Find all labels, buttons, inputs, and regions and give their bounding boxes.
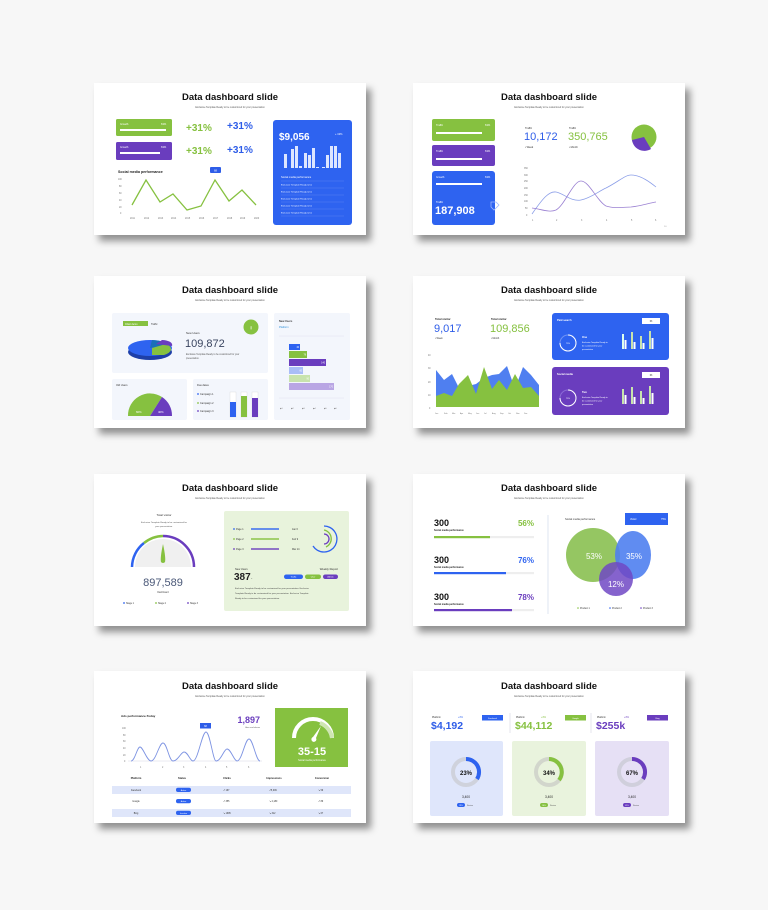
table: platforms: Facebook [131,790,142,792]
stats: total visitor: Total visitor [435,317,452,321]
panel: weekly report: User [311,576,316,579]
panel: weekly report: Page 1 [236,528,244,531]
card: donut blue 23%: Review [467,805,474,807]
wave chart: ads performance: 60 [123,741,126,743]
stats: platforms: Platform [516,716,525,719]
panel: weekly report: Mar 14 [292,548,300,551]
area chart: Jun [476,413,479,415]
panel: weekly report: Page 3 [236,548,244,551]
progress rows: 56% [518,519,534,528]
card: donut green 34%: Review [550,805,557,807]
panel: social media: Exclusive Template Ready to [582,396,609,399]
title [182,681,278,698]
area chart: Aug [492,412,496,415]
stats: platforms: Platform [597,716,606,719]
card: growth blue large: Traffic [436,200,444,204]
line chart: 5 [631,220,633,222]
panel: new users: 109,872 [185,338,225,350]
progress rows: 300 [434,518,449,528]
line chart: 150 [524,195,529,197]
progress rows: Social media performance [434,529,464,532]
card: donut purple 67%: 67% [625,805,629,807]
stats: traffic: • Week [525,145,534,149]
panel: new users platform bars: ◆1 [280,407,284,410]
panel: paid search: presentation [582,348,593,351]
line chart: 200 [524,188,529,190]
table: platforms: ↗5,009 [269,789,277,792]
panel: blue revenue: Exclusive Template Ready to be [281,190,313,194]
card: growth blue large: 187,908 [435,205,475,217]
table: platforms: Active [181,800,187,803]
panel: paid search: 75% [566,343,570,345]
panel: old users: 40% [158,410,164,414]
line chart: social media performance: 60 [119,193,122,195]
panel: new users platform bars: ◆3 [302,407,306,410]
panel: green gauge: 35-15 [298,746,326,758]
table: platforms: ↘ 67 [318,812,324,815]
wave chart: ads performance: 4 [205,767,207,769]
title: Data dashboard slide [182,92,278,103]
stats: total visitor: 109,856 [490,323,530,335]
panel: paid search [552,313,669,360]
card: traffic green: 63% [485,123,491,127]
line chart: social media performance: 2020 [254,218,260,220]
panel: new users [112,313,268,373]
gauge: total visitor: Dashboard [157,591,169,594]
line chart: social media performance: 68 [214,168,217,172]
title: Data dashboard slide [501,92,597,103]
panel: social media: Social media [557,372,573,376]
progress rows: 78% [518,593,534,602]
line chart: 3 [581,220,583,222]
venn diagram: Social media performance [565,517,596,521]
wave chart: ads performance [121,714,262,769]
line chart: social media performance: Social media performance [118,170,163,174]
line chart: 100 [524,201,529,203]
table: platforms: Platform [131,776,142,780]
area chart: Mar [452,413,456,415]
venn diagram: 53% [586,552,602,561]
panel: new users platform bars: ◆6 [334,407,338,410]
line chart: 6 [655,220,657,222]
line chart: 10 [664,226,667,228]
slide 7: ads performance and table [94,671,366,823]
wave chart: ads performance: 100 [122,728,127,730]
card: traffic green [432,119,495,141]
venn diagram: 35% [626,552,642,561]
panel: weekly report: Traffic [291,576,297,579]
panel: due dates: Campaign 1 [200,393,214,396]
card: donut green 34%: 3,400 [545,795,553,799]
card: donut purple 67%: 3,400 [628,795,636,799]
area chart: Oct [508,412,512,415]
area chart: Nov [516,413,520,415]
stats: platforms: Google [572,718,580,720]
wave chart: ads performance: 40 [123,748,126,750]
panel: new users platform bars [274,313,350,420]
panel: blue revenue: Exclusive Template Ready to be [281,184,313,186]
line chart: 300 [524,175,529,177]
area chart: 10 [428,395,431,397]
panel: new users platform bars: 40 [296,347,300,349]
panel: weekly report: Jan 6 [292,528,299,531]
panel: new users: presentation. [186,357,200,360]
panel: new users platform bars: ◆2 [291,407,295,410]
card: growth purple [116,142,172,160]
panel: social media: Two [582,390,587,394]
panel: paid search: Paid search [557,318,572,322]
panel: weekly report [224,511,349,611]
panel: blue revenue: Exclusive Template Ready to be [281,204,313,208]
card: growth purple: Growth [120,145,129,149]
title: Exclusive Template Ready to be customized for your presentation [514,497,584,500]
gauge: total visitor [123,513,199,605]
venn diagram: Visitor [630,518,637,521]
line chart: 1 [532,220,534,222]
line chart: 350 [524,168,529,170]
stats: platforms: +3% [458,716,464,719]
wave chart: ads performance: 2 [162,767,164,769]
panel: weekly report: Admin [327,576,334,579]
wave chart: ads performance: Likes and shares [245,727,260,729]
line chart: social media performance: 40 [119,200,122,202]
line chart [524,168,667,228]
line chart: social media performance: 20 [119,207,122,209]
title: Data dashboard slide [182,285,278,296]
panel: social media: presentation [582,403,593,406]
title: Exclusive Template Ready to be customized for your presentation [514,695,584,698]
line chart: social media performance: 2018 [227,218,233,220]
slide 5: gauge and weekly report [94,474,366,626]
line chart: 50 [525,208,528,210]
card: growth green [116,119,172,136]
progress rows: 300 [434,555,449,565]
venn diagram: 12% [608,580,624,589]
stats: traffic: Traffic [569,126,577,130]
card: donut green 34%: 34% [542,805,546,807]
panel: old users: 60% [136,410,142,414]
panel: paid search: One [582,335,588,339]
table: platforms: ↘ 312 [269,812,276,815]
card: donut purple 67%: 67% [626,771,639,777]
wave chart: ads performance: 1 [140,767,142,769]
title: Data dashboard slide [501,483,597,494]
title: Exclusive Template Ready to be customized for your presentation [195,497,265,500]
stats +31%: +31% [186,123,212,134]
line chart: social media performance [118,167,260,220]
title: Data dashboard slide [501,681,597,692]
slide 3: new users 3D pie and bars [94,276,366,428]
panel: blue revenue: Social media performance [281,175,312,179]
panel: new users: Exclusive Template Ready to be customized for your [186,353,240,356]
wave chart: ads performance: 3 [183,767,185,769]
panel: weekly report: Weekly Report [320,567,338,571]
card: growth blue large [432,171,499,225]
stats: total visitor: • Week [435,337,443,340]
gauge: total visitor: Stage 3 [190,602,199,605]
pie chart [632,124,656,151]
stats: platforms: +3% [541,716,547,719]
card: traffic green: Traffic [436,123,444,127]
panel: new users platform bars: Platform [279,325,289,329]
slide 1: growth and social media performance [94,83,366,235]
wave chart: ads performance: 6 [248,767,250,769]
progress rows [434,518,534,611]
card: donut blue 23% [430,741,503,816]
stats: total visitor: 9,017 [434,323,462,335]
panel: new users: Traffic [151,323,158,326]
title [501,681,597,698]
panel: weekly report: New Users [235,567,248,571]
card: traffic purple: 63% [485,149,491,153]
panel: paid search: be customized for your [582,344,603,348]
title: Exclusive Template Ready to be customized for your presentation [195,106,265,109]
progress rows: Social media performance [434,566,464,569]
panel: due dates: Campaign 3 [200,410,214,413]
gauge: total visitor: Stage 1 [126,602,135,605]
line chart: social media performance: 2015 [185,218,191,220]
stats: platforms: $255k [596,720,625,732]
table: platforms: ↘ 1695 [223,812,231,815]
line chart: social media performance: 2012 [144,218,150,220]
panel: blue revenue: Exclusive Template Ready to be [281,212,313,214]
table: platforms: Google [132,801,140,803]
panel: social media: 63 [650,375,653,377]
venn diagram: Product 2 [612,607,623,610]
area chart: 20 [428,382,431,384]
gauge: total visitor: 897,589 [143,577,183,589]
area chart: May [468,413,472,415]
wave chart: ads performance: Ads performance-Today [121,714,156,718]
title: Exclusive Template Ready to be customized for your presentation [195,695,265,698]
progress rows: 76% [518,556,534,565]
card: donut blue 23%: 23% [459,805,463,807]
panel: new users platform bars: 60 [299,370,303,372]
table: platforms: Clicks [223,776,231,780]
title [501,92,597,109]
venn diagram: 75% [661,518,667,521]
panel: green gauge [275,708,348,767]
panel: due dates: Due dates [197,383,210,387]
table: platforms: Active [181,789,187,792]
line chart: 0 [526,215,528,217]
gauge: total visitor: Total visitor [156,513,172,517]
line chart: 250 [524,181,529,183]
panel: new users platform bars: 170 [329,386,334,388]
stats +31% [186,121,253,157]
line chart: social media performance: 2013 [158,218,164,220]
title: Exclusive Template Ready to be customized for your presentation [514,299,584,302]
panel: weekly report: Ready to be customized for your presentation. [235,597,280,600]
area chart: Feb [444,413,448,415]
panel: due dates [193,379,268,420]
wave chart: ads performance: 0 [124,761,126,763]
area chart: 40 [428,355,431,357]
card: donut blue 23%: 3,400 [462,795,470,799]
line chart: social media performance: 2016 [199,218,205,220]
wave chart: ads performance: 68 [204,725,207,728]
card: growth green: 63% [161,122,167,126]
stats: total visitor: • Month [491,337,500,340]
table: platforms: Bing [134,813,139,815]
panel: blue revenue [273,120,352,225]
stats: total visitor [434,317,530,340]
stats: platforms: Platform [432,716,441,719]
area chart: Jan [435,413,438,415]
title: Data dashboard slide [182,681,278,692]
wave chart: ads performance: 5 [226,767,228,769]
panel: new users: Chart demo [125,323,138,326]
panel: paid search: Exclusive Template Ready to [582,341,609,344]
stats: total visitor: Total visitor [491,317,508,321]
panel: weekly report: Template Ready to be customized for your presentation. Exclusive Template [235,592,309,595]
panel: social media [552,367,669,415]
card: growth blue large: 63% [485,175,491,179]
stats +31%: +31% [227,121,253,132]
progress rows: Social media performance [434,603,464,606]
area chart: Jul [484,413,487,415]
title: Exclusive Template Ready to be customized for your presentation [514,106,584,109]
card: donut purple 67%: Review [633,805,640,807]
panel: new users platform bars: 90 [306,378,310,380]
panel: new users: New Users [186,331,200,335]
progress rows: 300 [434,592,449,602]
panel: blue revenue: + 13% [335,132,343,136]
area chart: Dec [524,413,528,415]
stats: platforms: Bing [655,718,660,720]
title: Exclusive Template Ready to be customized for your presentation [195,299,265,302]
card: growth blue large: Growth [436,175,445,179]
table: platforms: Conversion [315,776,330,780]
card: donut green 34% [512,741,586,816]
line chart: social media performance: 2017 [213,218,219,220]
area chart: Apr [460,412,463,415]
area chart: Sep [500,413,504,415]
card: donut purple 67% [595,741,669,816]
stats: traffic [524,126,608,149]
title: Data dashboard slide [501,285,597,296]
title [182,285,278,302]
line chart: 2 [556,220,558,222]
panel: weekly report: 387 [234,572,251,583]
venn diagram [565,513,668,610]
table: platforms: Impressions [266,776,282,780]
stats: traffic: 10,172 [524,131,558,143]
card: traffic purple: Traffic [436,149,444,153]
panel: weekly report: Exclusive Template Ready to be customized for your presentation. Exclusive [235,587,310,590]
panel: new users platform bars: New Users [279,319,293,323]
panel: old users [112,379,187,420]
line chart: social media performance: 100 [118,179,123,181]
table: platforms: ↗ 167 [223,789,230,792]
title [501,285,597,302]
title [182,92,278,109]
wave chart: ads performance: 1,897 [237,715,260,725]
panel: new users platform bars: ◆4 [313,407,317,410]
card: donut blue 23%: 23% [460,771,473,777]
panel: weekly report: Feb 9 [292,538,299,541]
stats: traffic: 350,765 [568,131,608,143]
card: traffic purple [432,145,495,166]
panel: weekly report: - [251,575,253,580]
wave chart: ads performance: 20 [123,755,126,757]
slide 4: visitors area chart [413,276,685,428]
panel: new users platform bars: ◆5 [324,407,328,410]
stats +31%: +31% [227,145,253,156]
table: platforms: Inactive [180,812,188,815]
panel: green gauge: Social media performance [298,759,327,762]
area chart: 30 [428,368,431,370]
panel: social media: be customized for your [582,400,603,402]
table: platforms: ↗ 89 [318,800,324,803]
line chart: social media performance: 2019 [240,218,246,220]
panel: paid search: 63 [650,321,653,323]
panel: due dates: Campaign 2 [200,402,214,405]
venn diagram: Product 3 [643,607,654,610]
table: platforms: ↗ 355 [223,800,230,803]
icon: radial rings [313,526,337,552]
table: platforms: ↘ 59 [318,789,324,792]
slide 6: progress bars and venn diagram [413,474,685,626]
stats: platforms: +3% [624,716,630,719]
line chart: social media performance: 2014 [171,218,177,220]
card: growth green: Growth [120,122,129,126]
panel: new users: ⫼ [250,326,252,330]
venn diagram: Product 1 [580,607,591,610]
panel: blue revenue: Exclusive Template Ready to be [281,198,313,200]
gauge: total visitor: your presentation. [155,525,173,528]
stats: traffic: • Month [569,145,578,149]
panel: social media: 75% [566,398,570,400]
stats: platforms: $44,112 [515,720,553,732]
area chart [428,355,539,415]
title [501,483,597,500]
card: donut green 34%: 34% [543,771,556,777]
gauge: total visitor: Stage 2 [158,602,167,605]
title: Data dashboard slide [182,483,278,494]
panel: weekly report: Page 2 [236,538,244,541]
line chart: social media performance: 2011 [130,218,136,220]
icon: 3D pie [128,340,172,360]
wave chart: ads performance: 80 [123,735,126,737]
table: platforms [112,776,351,817]
panel: old users: Old Users [116,383,128,387]
table: platforms: ↘ 2,180 [269,800,278,803]
panel: new users platform bars: 78 [303,354,307,356]
gauge: total visitor: Exclusive Template Ready to be customized for [141,521,187,524]
slide 2: traffic and line chart [413,83,685,235]
line chart: social media performance: 0 [120,213,122,215]
stats: platforms [431,713,668,733]
area chart: 0 [429,408,431,410]
stats: platforms: Facebook [488,718,497,720]
line chart: social media performance: 80 [119,186,122,188]
stats: traffic: Traffic [525,126,533,130]
line chart: 4 [606,220,608,222]
panel: blue revenue: $9,056 [279,132,310,143]
stats +31%: +31% [186,146,212,157]
slide 8: platform donuts [413,671,685,823]
title [182,483,278,500]
card: growth purple: 63% [161,145,167,149]
panel: new users platform bars: 140 [321,362,326,364]
table: platforms: Status [178,776,187,780]
stats: platforms: $4,192 [431,720,463,732]
